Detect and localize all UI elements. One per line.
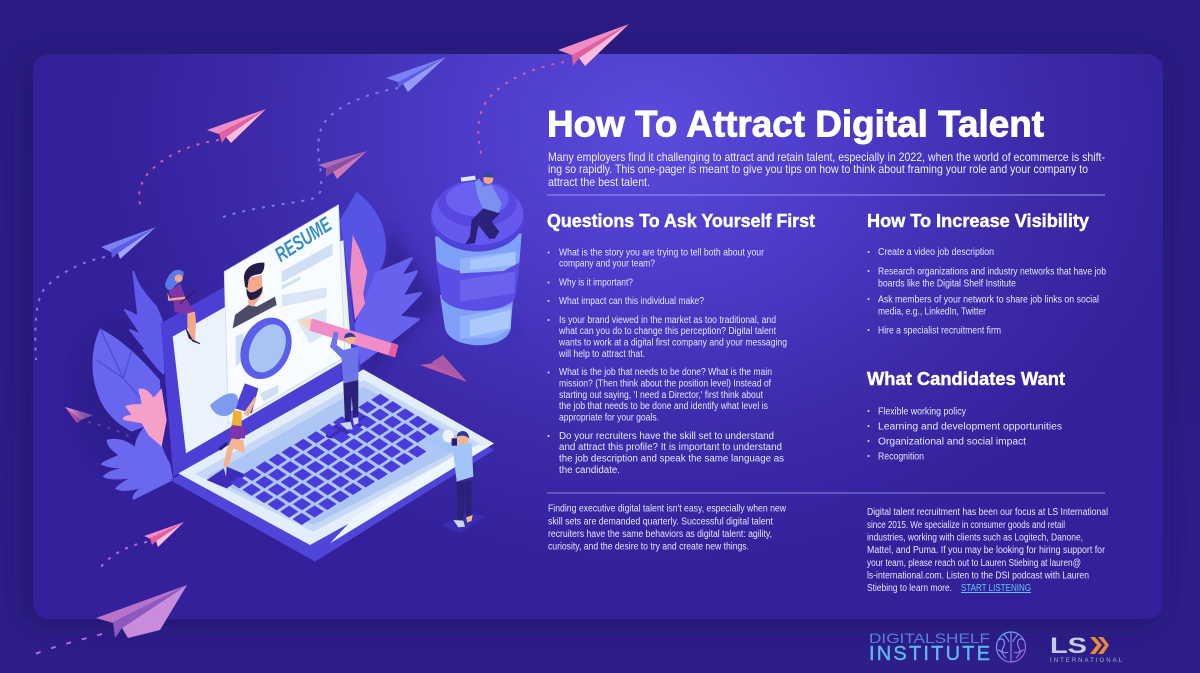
person: man with pencil	[330, 332, 358, 429]
logo: Digital Shelf Institute: DIGITALSHELF	[869, 630, 990, 646]
list: candidates: Organizational and social impact	[878, 436, 1026, 448]
icon: small pink plane	[65, 407, 93, 423]
icon: blue paper plane	[386, 57, 446, 92]
list: visibility: Hire a specialist recruitment firm	[878, 326, 1001, 336]
icon: big mauve plane	[96, 585, 187, 638]
list: questions	[548, 248, 787, 476]
text block: about LS International: Stiebing to learn more.	[867, 583, 952, 594]
list: questions: What is the job that needs to be done? What is the main	[559, 367, 772, 378]
heading: questions: Questions To Ask Yourself First	[547, 210, 815, 231]
main card panel	[33, 54, 1163, 619]
text block: about LS International: since 2015. We specialize in consumer goods and retail	[867, 520, 1065, 531]
magnifying glass	[231, 309, 301, 413]
laptop lid	[161, 220, 361, 477]
upper left leaf	[125, 272, 163, 373]
text block: executive talent: Finding executive digital talent isn't easy, especially when new	[548, 504, 787, 514]
list: questions: What is the story you are trying to tell both about your	[559, 248, 765, 258]
list: visibility: media, e.g., LinkedIn, Twitter	[878, 306, 987, 318]
icon: mauve plane right	[420, 355, 467, 382]
list: visibility: boards like the Digital Shelf Institute	[878, 278, 1016, 290]
list: questions: appropriate for your goals.	[559, 412, 659, 424]
logo: Digital Shelf Institute: INSTITUTE	[869, 643, 990, 665]
list: candidates: Learning and development opportunities	[878, 422, 1062, 432]
list: questions: the candidate.	[559, 465, 620, 476]
list: visibility: Create a video job description	[878, 247, 994, 258]
icon: small pink plane bottom	[144, 522, 184, 547]
intro paragraph	[548, 151, 1105, 189]
list: visibility: Research organizations and industry networks that have job	[878, 266, 1106, 278]
text block: about LS International: your team, please reach out to Lauren Stiebing at lauren@	[867, 558, 1081, 569]
person: woman sitting on lid	[165, 270, 200, 344]
text block: about LS International	[867, 507, 1108, 594]
illustration: laptop and resume	[73, 192, 440, 467]
logo: LS International	[1050, 633, 1123, 664]
intro paragraph: Many employers find it challenging to attract and retain talent, especially in 2022, when the world of ecommerce is shift-	[548, 151, 1105, 164]
person: man with binoculars	[425, 430, 485, 533]
list: visibility: Ask members of your network to share job links on social	[878, 294, 1099, 306]
list: questions: Is your brand viewed in the market as too traditional, and	[559, 315, 776, 326]
dashed flight trails	[35, 62, 564, 654]
text block: executive talent	[548, 504, 787, 552]
icon: pink paper plane left	[207, 109, 266, 143]
text block: about LS International: ls-international.com. Listen to the DSI podcast with Lauren	[867, 570, 1089, 582]
list: questions: What impact can this individual make?	[559, 296, 705, 307]
list: questions: wants to work at a digital first company and your messaging	[558, 338, 787, 348]
icon: blue paper plane left	[101, 227, 156, 259]
title: How To Attract Digital Talent	[547, 104, 1044, 144]
heading: visibility: How To Increase Visibility	[867, 210, 1090, 231]
list: questions: Why is it important?	[559, 278, 634, 288]
list: questions: what can you do to change this perception? Digital talent	[558, 326, 776, 337]
icon: mauve paper plane	[318, 151, 367, 179]
text block: executive talent: recruiters have the same behaviors as digital talent: agility,	[548, 529, 772, 540]
resume portrait	[233, 263, 277, 328]
resume heading: RESUME	[271, 213, 337, 267]
text block: executive talent: curiosity, and the desire to try and create new things.	[548, 542, 749, 552]
text block: about LS International: industries, working with clients such as Logitech, Danone,	[867, 532, 1083, 544]
list: questions: and attract this profile? It is important to understand	[559, 442, 782, 453]
logo: LS International: LS	[1050, 633, 1087, 658]
intro paragraph: attract the best talent.	[548, 176, 650, 189]
keyboard keys	[231, 394, 439, 525]
list: candidates	[868, 406, 1062, 462]
person: man on cup with telescope	[461, 171, 502, 244]
list: questions: mission? (Then think about the position level) Instead of	[559, 378, 771, 390]
logo: Digital Shelf Institute	[869, 630, 1026, 665]
list: questions: starting out saying, 'I need a Director,' first think about	[559, 390, 763, 401]
intro paragraph: ing so rapidly. This one-pager is meant to give you tips on how to think about framing your role and your company to	[548, 163, 1088, 176]
person: woman with magnifying glass	[210, 393, 257, 477]
text block: about LS International: START LISTENING	[961, 583, 1031, 594]
logo: LS International: INTERNATIONAL	[1050, 658, 1123, 664]
list: questions: will help to attract that.	[558, 349, 645, 360]
list: questions: company and your team?	[559, 258, 656, 270]
heading: candidates: What Candidates Want	[867, 368, 1065, 389]
icon: brain	[996, 632, 1026, 662]
list: questions: Do your recruiters have the skill set to understand	[559, 431, 774, 442]
list: visibility	[868, 247, 1106, 336]
laptop base	[170, 357, 494, 562]
illustration shadows	[73, 227, 440, 467]
list: questions: the job that needs to be done and identify what level is	[559, 401, 768, 412]
right leaves	[340, 192, 421, 363]
text block: about LS International: Mattel, and Puma. If you may be looking for hiring support for	[867, 545, 1106, 556]
icon: pink paper plane top	[558, 24, 629, 66]
text block: executive talent: skill sets are demanded quarterly. Successful digital talent	[548, 516, 773, 528]
list: candidates: Recognition	[878, 452, 924, 462]
text block: about LS International: Digital talent recruitment has been our focus at LS International	[867, 507, 1108, 518]
resume paper	[224, 205, 345, 423]
pencil	[298, 318, 398, 357]
coffee cup	[431, 171, 524, 353]
left leaves	[92, 328, 173, 500]
list: candidates: Flexible working policy	[878, 406, 966, 418]
list: questions: the job description and speak the same language as	[559, 454, 784, 464]
